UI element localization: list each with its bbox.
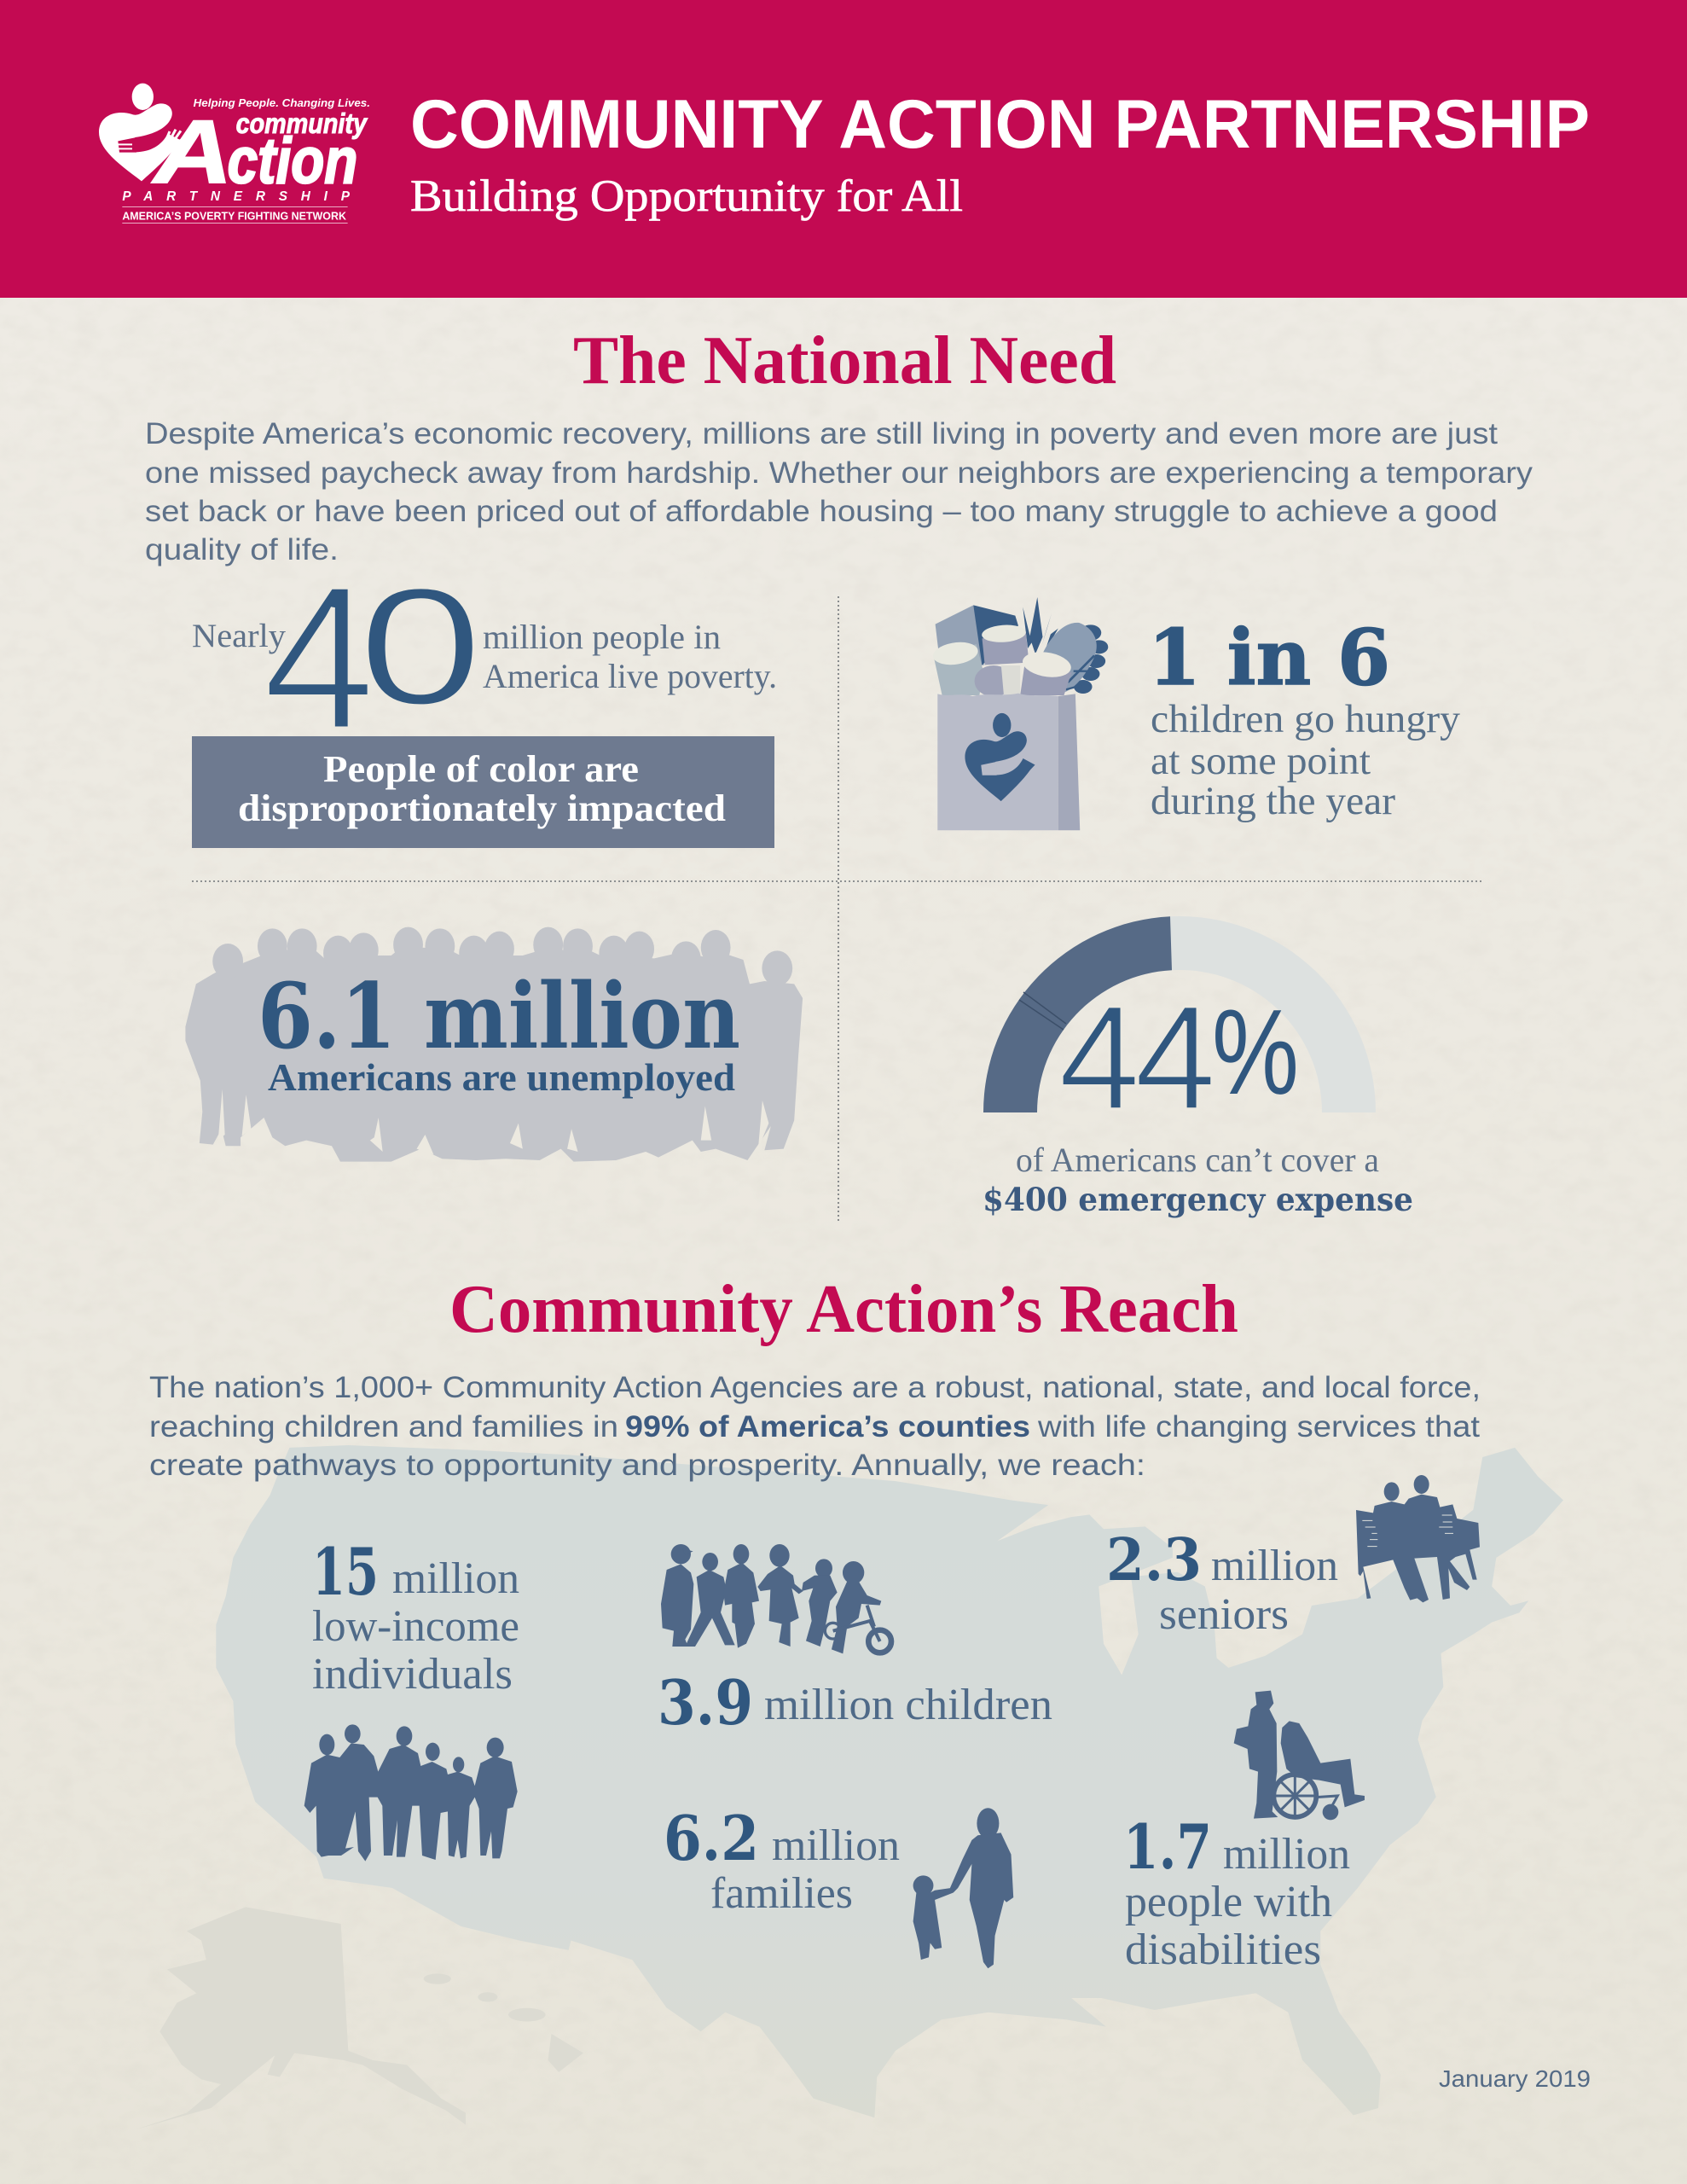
label: million people with disabilities: [1125, 1830, 1350, 1974]
heading: The National Need: The National Need: [573, 323, 1116, 398]
stat: 2.3 million seniors: [1106, 1475, 1480, 1639]
label: million people with disabilities: people with: [1125, 1878, 1332, 1926]
label: million families: [710, 1821, 900, 1918]
logo: A: [150, 102, 233, 202]
logo: community: [236, 108, 368, 140]
stat: 1.7 million people with disabilities: [1123, 1691, 1365, 1974]
intro paragraph: national need: quality of life.: [145, 533, 339, 566]
text: Nearly: Nearly: [192, 618, 287, 654]
icon: mother and child: [913, 1808, 1013, 1968]
intro paragraph: reach: create pathways to opportunity and prosperity. Annually, we reach:: [149, 1449, 1145, 1482]
number: 6.2: 6.2: [664, 1802, 759, 1874]
icon: group of adults: [304, 1724, 518, 1862]
text: Americans are unemployed: Americans are unemployed: [268, 1056, 735, 1099]
text: of Americans: of Americans can’t cover a: [1016, 1141, 1379, 1179]
intro paragraph: reach: [149, 1371, 1481, 1482]
intro paragraph: national need: set back or have been priced out of affordable housing – too many struggle to achieve a good: [145, 495, 1498, 528]
logo: ction: [228, 125, 357, 197]
stat: 6.2 million families: [664, 1802, 1013, 1968]
icon: crowd silhouette: [185, 927, 803, 1162]
text: million people: America live poverty.: [483, 657, 777, 695]
text: $400 emergency expense: $400 emergency expense: [983, 1181, 1413, 1218]
label: million low-income individuals: low-income: [312, 1602, 519, 1651]
intro paragraph: reach: reaching children and families in: [149, 1410, 618, 1443]
stat: 1 in 6 children: [930, 597, 1461, 830]
map: contiguous states: [216, 1445, 1563, 2117]
label: million people with disabilities: million: [1223, 1830, 1350, 1879]
icon: children holding hands with bike: [661, 1544, 891, 1653]
label: million low-income individuals: individuals: [312, 1650, 513, 1699]
number: 44%: 4: [1134, 975, 1216, 1141]
logo: [99, 84, 370, 224]
header band: [0, 0, 1687, 298]
map of the United States: [136, 1445, 1563, 2129]
label: million children: million children: [764, 1681, 1052, 1729]
text: million people: million people in: [483, 618, 721, 656]
stat: 3.9 million children: [658, 1544, 1052, 1739]
text: children go hungry: during the year: [1151, 779, 1395, 823]
big number 40: 4: [263, 543, 375, 773]
number: 3.9: 3.9: [658, 1666, 753, 1739]
number: 1.7: 1.7: [1123, 1810, 1212, 1883]
label: million low-income individuals: million: [392, 1554, 519, 1603]
intro paragraph: reach: The nation’s 1,000+ Community Action Agencies are a robust, national, state, and local force,: [149, 1371, 1481, 1404]
stat: 6.1 million unemployed: [185, 927, 803, 1162]
intro paragraph: national need: Despite America’s economic recovery, millions are still living in poverty and even more are just: [145, 417, 1498, 450]
icon: wheelchair and carer: [1234, 1691, 1365, 1820]
callout: people of color: [192, 736, 774, 848]
logo: AMERICA’S POVERTY FIGHTING NETWORK: [122, 209, 346, 222]
intro paragraph: national need: one missed paycheck away from hardship. Whether our neighbors are experiencing a temporary: [145, 456, 1533, 490]
text: million people: [483, 618, 777, 695]
dotted quadrant dividers: [192, 596, 1484, 1223]
date footer: January 2019: [1439, 2065, 1591, 2092]
big number 40: 0: [358, 554, 483, 740]
callout: people of color: disproportionately impacted: [238, 787, 726, 829]
label: million seniors: [1159, 1542, 1338, 1639]
text: children go hungry: children go hungry: [1151, 697, 1461, 741]
label: million families: million: [772, 1821, 900, 1870]
number: 15: 15: [312, 1534, 379, 1610]
label: million people with disabilities: disabilities: [1125, 1926, 1321, 1974]
heading: Community Action's Reach: Community Action’s Reach: [449, 1272, 1238, 1347]
logo: Helping People. Changing Lives.: [194, 96, 370, 109]
logo: PARTNERSHIP: [122, 189, 351, 204]
number: 2.3: 2.3: [1106, 1526, 1202, 1594]
text: children go hungry: at some point: [1151, 739, 1371, 783]
chart: half gauge: [983, 916, 1376, 1112]
icon: seniors on bench: [1356, 1475, 1480, 1602]
label: million low-income individuals: [312, 1554, 519, 1699]
icon: grocery bag: [930, 597, 1108, 830]
subtitle: Building Opportunity for All: [410, 171, 963, 221]
intro paragraph: reach: 99% of America’s counties: [625, 1410, 1030, 1443]
text: children go hungry: [1151, 697, 1461, 823]
callout: people of color: People of color are: [323, 748, 639, 790]
label: million seniors: seniors: [1159, 1590, 1289, 1639]
stat: 15 million individuals: [304, 1534, 519, 1862]
number: 1 in 6: 1 in 6: [1148, 613, 1390, 703]
big number 40: [263, 543, 483, 773]
stat: 44 percent: [983, 916, 1413, 1218]
map: Alaska and Hawaii: [136, 1907, 583, 2129]
title: COMMUNITY ACTION PARTNERSHIP: [410, 86, 1590, 163]
number: 44%: 4: [1058, 975, 1140, 1141]
number: 44%: %: [1212, 985, 1299, 1120]
label: million families: families: [710, 1869, 853, 1918]
intro paragraph: national need: [145, 417, 1533, 566]
number: 44%: [1058, 975, 1299, 1141]
number: 6.1 million: 6.1 million: [258, 962, 740, 1069]
intro paragraph: reach: with life changing services that: [1037, 1410, 1480, 1443]
stat: 40 million in poverty: [192, 543, 777, 848]
label: million seniors: million: [1211, 1542, 1338, 1590]
